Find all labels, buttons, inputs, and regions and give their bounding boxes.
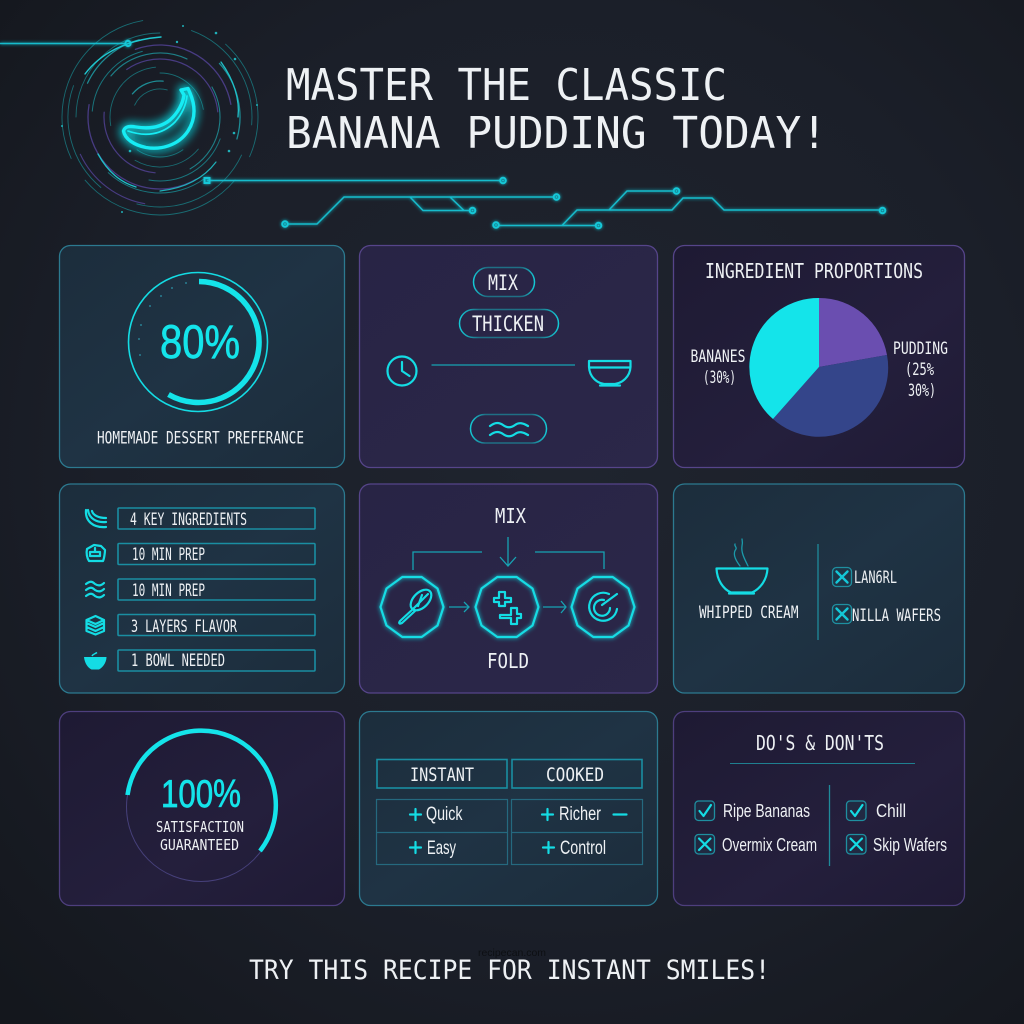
column: cooked rows xyxy=(512,800,642,864)
pill: waves xyxy=(470,414,546,443)
label: pudding xyxy=(893,339,948,401)
panel: whipped cream xyxy=(674,484,964,693)
item: ripe bananas xyxy=(695,800,810,821)
label: satisfaction guaranteed xyxy=(156,818,244,854)
icon: clock xyxy=(388,356,416,386)
panel: key stats list xyxy=(60,484,344,693)
column: instant rows xyxy=(376,800,508,864)
row: 1 bowl needed xyxy=(84,650,315,671)
row: 10 min prep: 10 MIN PREP xyxy=(132,581,205,601)
checklist item: lan6rl: LAN6RL xyxy=(854,568,897,587)
column: cooked rows: Control xyxy=(560,838,606,859)
row: 10 min prep: 10 MIN PREP xyxy=(132,545,205,565)
panel: satisfaction guaranteed xyxy=(60,712,344,906)
label: bananes: (30%) xyxy=(703,368,736,388)
column header: instant: INSTANT xyxy=(410,764,474,786)
column header: cooked: COOKED xyxy=(546,764,604,786)
gauge: 100% xyxy=(126,731,276,882)
heading: ingredient proportions: INGREDIENT PROPORTIONS xyxy=(705,259,923,283)
pill: thicken: THICKEN xyxy=(472,312,544,336)
column header: cooked xyxy=(512,760,642,788)
item: chill: Chill xyxy=(876,800,906,821)
checklist item: nilla wafers: NILLA WAFERS xyxy=(852,606,941,625)
label: whipped cream: WHIPPED CREAM xyxy=(699,603,798,623)
column: instant rows: Quick xyxy=(426,804,463,825)
panel: mix and fold flow xyxy=(360,484,658,693)
panel: do's and don'ts xyxy=(674,712,964,906)
panel: ingredient proportions xyxy=(674,246,964,468)
pill: mix: MIX xyxy=(488,271,518,295)
watermark: recipecan.com: recipecan.com xyxy=(478,947,546,959)
gauge: 80% xyxy=(128,272,268,412)
item: overmix cream xyxy=(695,834,817,855)
column: instant rows: Easy xyxy=(427,838,456,859)
row: 10 min prep xyxy=(86,579,315,601)
column: cooked rows: Richer xyxy=(559,804,602,825)
title: MASTER THE CLASSIC xyxy=(286,60,727,111)
item: chill xyxy=(846,800,906,821)
icon: bowl xyxy=(589,361,630,386)
item: overmix cream: Overmix Cream xyxy=(722,834,817,855)
item: skip wafers: Skip Wafers xyxy=(873,834,947,855)
icon: target xyxy=(572,577,634,637)
pill: mix xyxy=(474,268,534,296)
icon: neon banana with concentric rings xyxy=(22,0,298,255)
pie chart xyxy=(749,298,888,437)
title xyxy=(286,60,827,159)
label: bananes: BANANES xyxy=(690,347,746,367)
column header: instant xyxy=(377,760,507,788)
panel: instant vs cooked table xyxy=(360,712,658,906)
checklist item: lan6rl xyxy=(832,568,897,587)
circuit traces xyxy=(0,41,885,228)
icon: plus signs xyxy=(476,577,538,637)
icon: whisk xyxy=(380,577,444,637)
connector bracket and down arrow xyxy=(413,537,604,570)
row: 4 key ingredients: 4 KEY INGREDIENTS xyxy=(130,510,247,530)
footer tagline: TRY THIS RECIPE FOR INSTANT SMILES! xyxy=(249,955,770,986)
heading: do's and don'ts: DO'S & DON'TS xyxy=(756,731,884,755)
panel: homemade dessert preference xyxy=(60,246,344,468)
row: 1 bowl needed: 1 BOWL NEEDED xyxy=(131,651,225,671)
arrow xyxy=(543,601,566,613)
label: bananes xyxy=(690,347,746,388)
checklist item: nilla wafers xyxy=(832,604,941,625)
label: satisfaction guaranteed: GUARANTEED xyxy=(160,836,239,854)
label: mix: MIX xyxy=(495,504,526,528)
title: BANANA PUDDING TODAY! xyxy=(286,108,827,159)
label: pudding: (25% xyxy=(905,360,934,380)
item: ripe bananas: Ripe Bananas xyxy=(723,800,810,821)
panel: process steps xyxy=(360,246,658,468)
label: fold: FOLD xyxy=(487,649,529,673)
value: 80%: 80% xyxy=(160,315,240,368)
row: 3 layers flavor xyxy=(86,614,315,637)
label: pudding: 30%) xyxy=(908,381,936,401)
label: homemade dessert preferance: HOMEMADE DESSERT PREFERANCE xyxy=(97,428,304,448)
icon: steaming bowl xyxy=(716,539,768,594)
label: satisfaction guaranteed: SATISFACTION xyxy=(156,818,244,836)
row: 3 layers flavor: 3 LAYERS FLAVOR xyxy=(131,617,238,637)
item: skip wafers xyxy=(846,834,947,855)
row: 4 key ingredients xyxy=(86,508,315,530)
row: 10 min prep xyxy=(87,544,315,565)
value: 100%: 100% xyxy=(161,773,241,816)
label: pudding: PUDDING xyxy=(893,339,948,359)
arrow xyxy=(449,602,469,612)
